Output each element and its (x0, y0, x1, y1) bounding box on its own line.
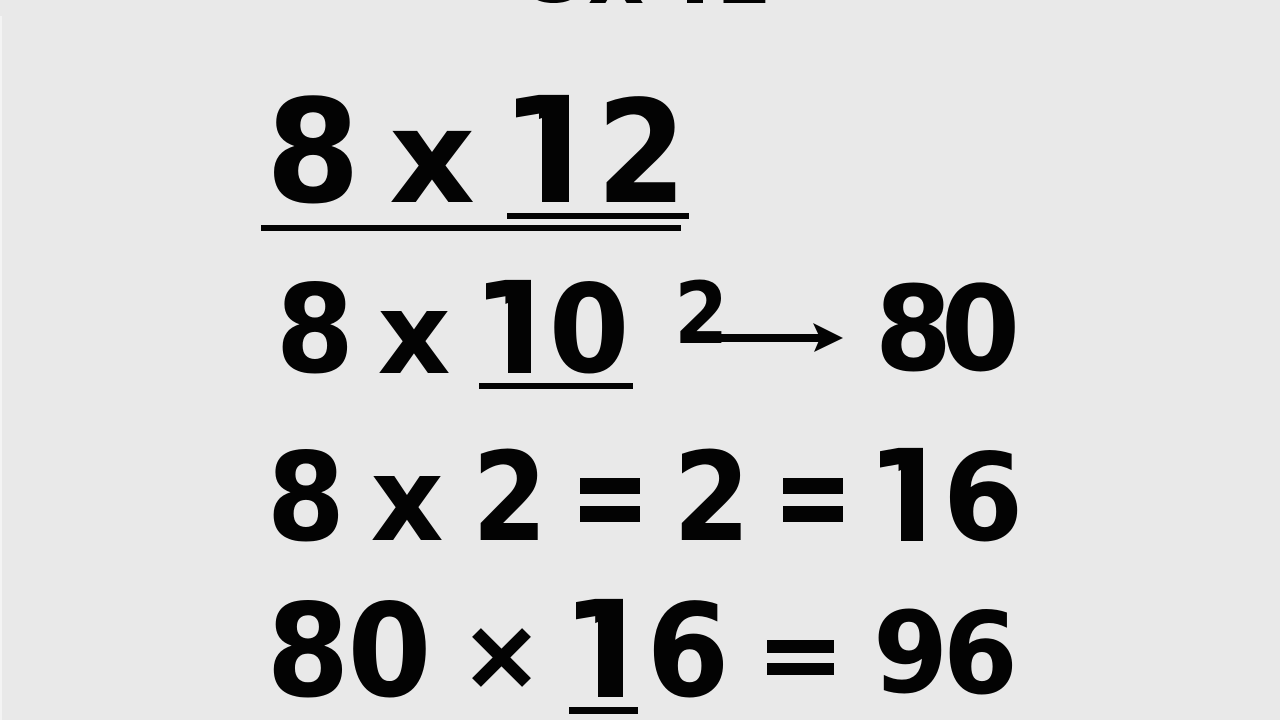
step two: 8 x 2 = 2 = 16: 2 (472, 427, 547, 570)
problem: 8 x 12 (261, 65, 689, 237)
result 96: 6 (943, 588, 1018, 720)
step two: 8 x 2 = 2 = 16: 2 (673, 426, 750, 569)
result 80 (875, 261, 1020, 398)
step one: 8 x 10 gives 80: 8 (276, 258, 354, 401)
step two: 8 x 2 = 2 = 16: 6 (943, 428, 1023, 569)
cropped title: 8 x 12 (521, 0, 772, 28)
arrow (720, 323, 843, 352)
multiplication sign (476, 632, 526, 682)
step two: 8 x 2 = 2 = 16: 1 (857, 423, 959, 572)
step two: 8 x 2 = 2 = 16: x (370, 432, 444, 568)
result 80: 0 (941, 263, 1020, 398)
result 96: 9 (873, 588, 948, 718)
problem: 8 x 12: x (389, 83, 475, 234)
step two: 8 x 2 = 2 = 16 (267, 423, 1023, 572)
step one: 8 x 10 gives 80 (276, 255, 1020, 404)
result 80: 8 (875, 261, 952, 398)
equals sign (767, 640, 834, 675)
problem: 8 x 12: 8 (266, 69, 360, 235)
problem: 8 x 12: 1 (488, 65, 613, 237)
carried 2: 2 (674, 264, 728, 364)
step one: 8 x 10 gives 80: 1 (462, 255, 569, 404)
step one: 8 x 10 gives 80: x (378, 268, 451, 400)
result 96 (873, 588, 1018, 720)
step one: 8 x 10 gives 80: 0 (549, 259, 629, 402)
step three: 80 x 16 = 96 (266, 572, 1018, 720)
problem: 8 x 12: 2 (596, 70, 686, 237)
step two: 8 x 2 = 2 = 16: 8 (267, 426, 345, 569)
